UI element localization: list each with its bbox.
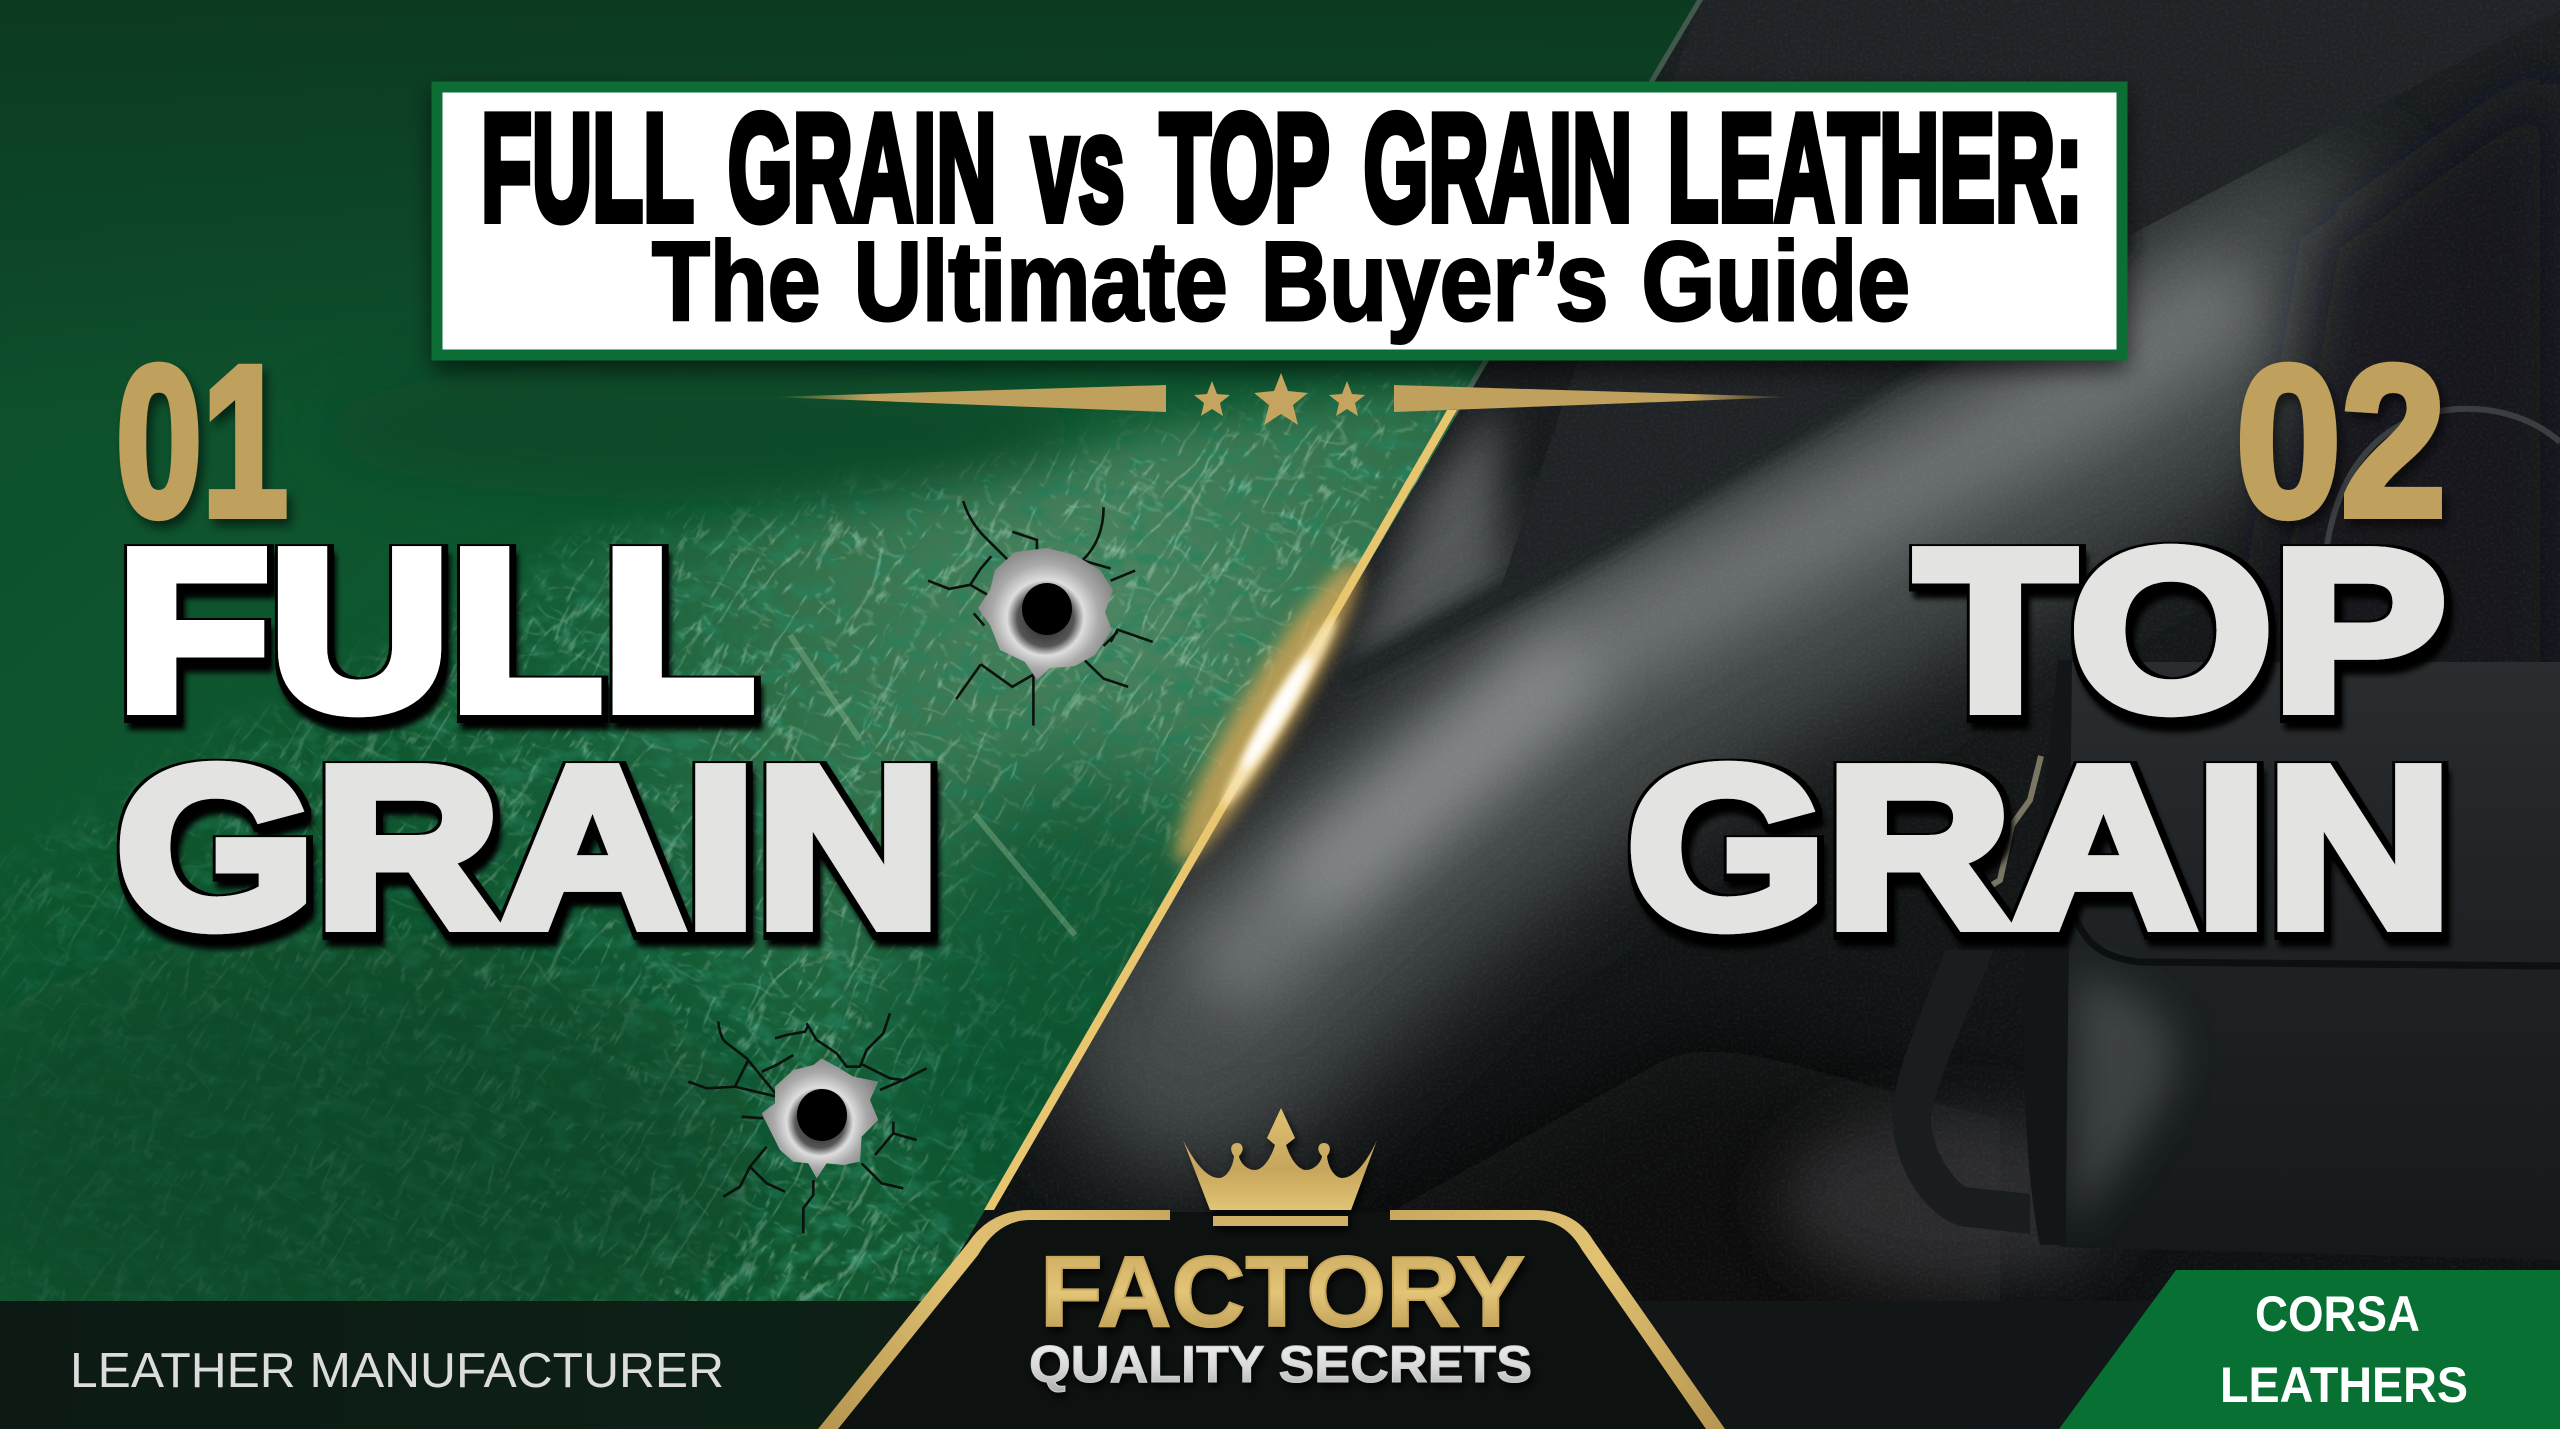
factory quality secrets badge xyxy=(818,1108,1725,1429)
handbag illustration xyxy=(1892,409,2560,1260)
fold edge shadow xyxy=(1340,235,2130,682)
leather hide surface xyxy=(0,368,1470,1301)
FULL heading: FULL xyxy=(117,504,755,758)
bag body xyxy=(2060,662,2560,1260)
bag gusset xyxy=(2024,660,2072,1245)
CORSA text: CORSA xyxy=(2255,1286,2420,1342)
right bar xyxy=(1394,385,1792,412)
dark right field xyxy=(2230,70,2560,800)
leather roll highlight xyxy=(1240,310,2210,960)
right heading block xyxy=(1627,322,2452,975)
background: green full grain leather side xyxy=(0,0,1720,1429)
TOP heading: TOP xyxy=(1916,504,2446,758)
stars xyxy=(1194,373,1365,425)
badge panel xyxy=(820,1212,1722,1429)
bag strap xyxy=(1892,950,2030,1234)
silver rim upper xyxy=(978,548,1113,680)
cracks around lower hole xyxy=(688,1013,927,1233)
bag highlight xyxy=(2072,975,2174,1230)
bottom strip xyxy=(0,1301,2560,1429)
QUALITY SECRETS text: QUALITY SECRETS xyxy=(1029,1336,1532,1394)
bullet hole: upper xyxy=(928,501,1153,726)
bag handle xyxy=(2325,409,2560,560)
leather manufacturer label: LEATHER MANUFACTURER xyxy=(70,1344,724,1398)
background: dark top grain leather side xyxy=(958,0,2560,1301)
leather roll wide sheen xyxy=(1190,290,2280,1040)
corsa leathers tag xyxy=(2059,1270,2560,1429)
gold diagonal divider with flare xyxy=(984,0,1703,1210)
cracks around upper hole xyxy=(928,501,1153,726)
buckle chain xyxy=(1973,756,2041,897)
silver rim lower xyxy=(762,1058,878,1178)
title box xyxy=(437,83,2122,355)
LEATHERS text: LEATHERS xyxy=(2220,1357,2468,1413)
title line 2: The Ultimate Buyer’s Guide xyxy=(652,219,1910,344)
gold frame left xyxy=(818,1210,1170,1429)
left bar xyxy=(770,385,1166,412)
left heading block xyxy=(116,322,941,975)
number 02: 02 xyxy=(2236,322,2446,561)
GRAIN heading left: GRAIN xyxy=(116,721,941,975)
ornament: bars and stars xyxy=(770,373,1792,425)
crown xyxy=(1183,1108,1377,1226)
GRAIN heading right: GRAIN xyxy=(1627,721,2452,975)
bullet hole: lower xyxy=(688,1013,927,1233)
number 01: 01 xyxy=(116,322,288,561)
black hole lower xyxy=(797,1089,847,1141)
gold frame right xyxy=(1390,1210,1725,1429)
upper fold of leather roll xyxy=(1340,400,1500,690)
bag flap xyxy=(2072,905,2560,966)
black hole upper xyxy=(1022,583,1072,635)
FACTORY text: FACTORY xyxy=(1040,1236,1525,1348)
